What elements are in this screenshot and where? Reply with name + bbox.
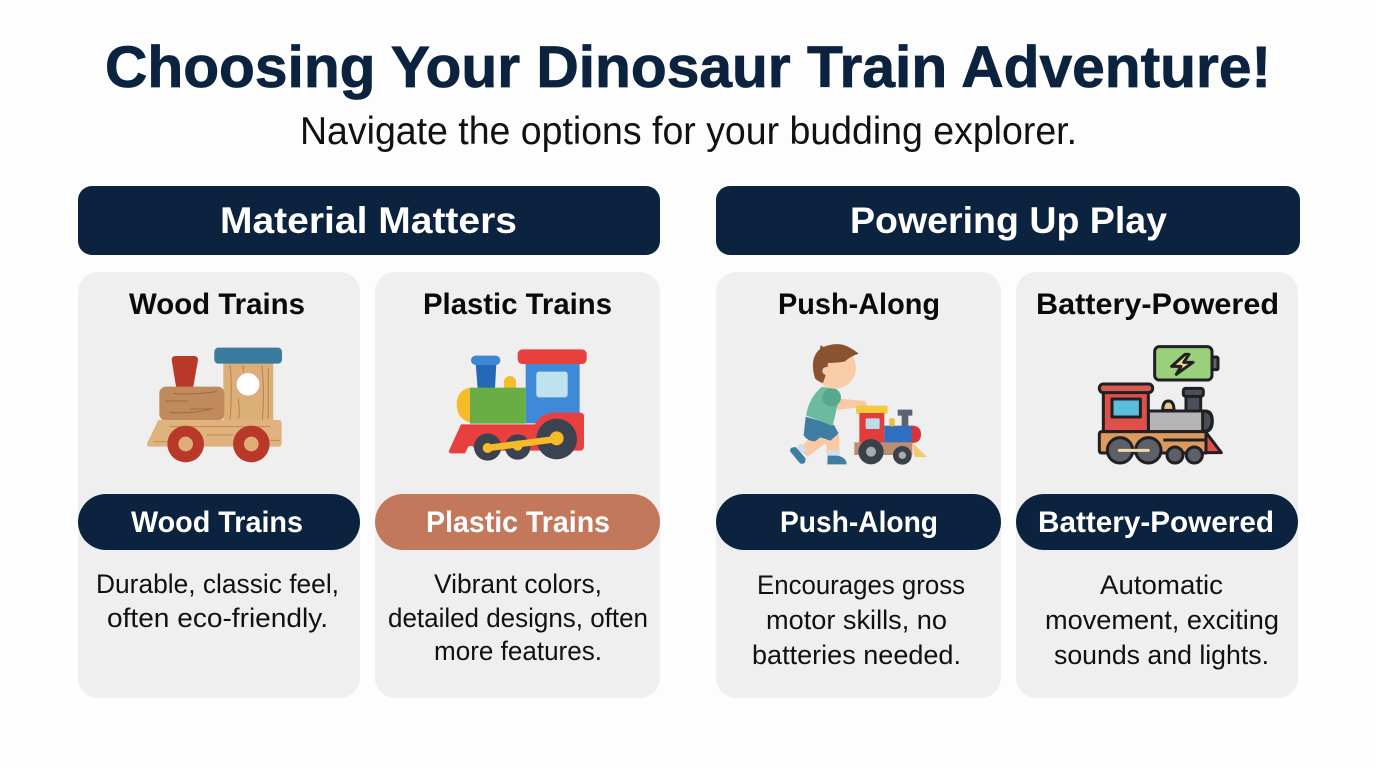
section header: Powering Up Play — [716, 186, 1300, 255]
label pill: battery-powered: Battery-Powered — [1038, 506, 1274, 539]
panel: plastic trains — [375, 272, 660, 698]
panel: push-along — [716, 272, 1001, 698]
description: plastic trains: more features. — [434, 636, 602, 666]
icon: child pushing toy train — [790, 344, 927, 465]
description: push-along: batteries needed. — [752, 640, 961, 670]
heading: battery-powered: Battery-Powered — [1036, 288, 1279, 321]
panel: battery-powered — [1016, 272, 1298, 698]
label pill: battery-powered — [1016, 494, 1298, 550]
description: push-along — [752, 570, 965, 670]
section header: Powering Up Play: Powering Up Play — [850, 200, 1167, 241]
label pill: wood trains — [78, 494, 360, 550]
subtitle: Navigate the options for your budding explorer. — [300, 110, 1077, 153]
heading: push-along: Push-Along — [778, 288, 940, 321]
description: battery-powered: sounds and lights. — [1054, 640, 1269, 670]
label pill: wood trains: Wood Trains — [131, 506, 303, 539]
description: battery-powered: movement, exciting — [1045, 605, 1279, 635]
description: plastic trains — [388, 569, 648, 666]
description: plastic trains: Vibrant colors, — [434, 569, 602, 599]
label pill: plastic trains — [375, 494, 660, 550]
heading: wood trains: Wood Trains — [129, 288, 305, 321]
description: push-along: Encourages gross — [757, 570, 965, 600]
icon: wooden train — [147, 348, 282, 462]
panel: wood trains — [78, 272, 360, 698]
description: wood trains — [96, 569, 339, 633]
heading: plastic trains: Plastic Trains — [423, 288, 612, 321]
section header: Material Matters: Material Matters — [220, 200, 517, 241]
label pill: push-along: Push-Along — [780, 506, 938, 539]
description: battery-powered: Automatic — [1100, 570, 1223, 600]
icon: plastic train — [449, 349, 587, 461]
section header: Material Matters — [78, 186, 660, 255]
label pill: push-along — [716, 494, 1001, 550]
description: wood trains: often eco-friendly. — [107, 603, 328, 633]
label pill: plastic trains: Plastic Trains — [426, 506, 610, 539]
description: battery-powered — [1045, 570, 1279, 670]
title: Choosing Your Dinosaur Train Adventure! — [105, 35, 1271, 100]
description: wood trains: Durable, classic feel, — [96, 569, 339, 599]
description: push-along: motor skills, no — [766, 605, 947, 635]
icon: battery train — [1099, 347, 1221, 463]
description: plastic trains: detailed designs, often — [388, 603, 648, 633]
